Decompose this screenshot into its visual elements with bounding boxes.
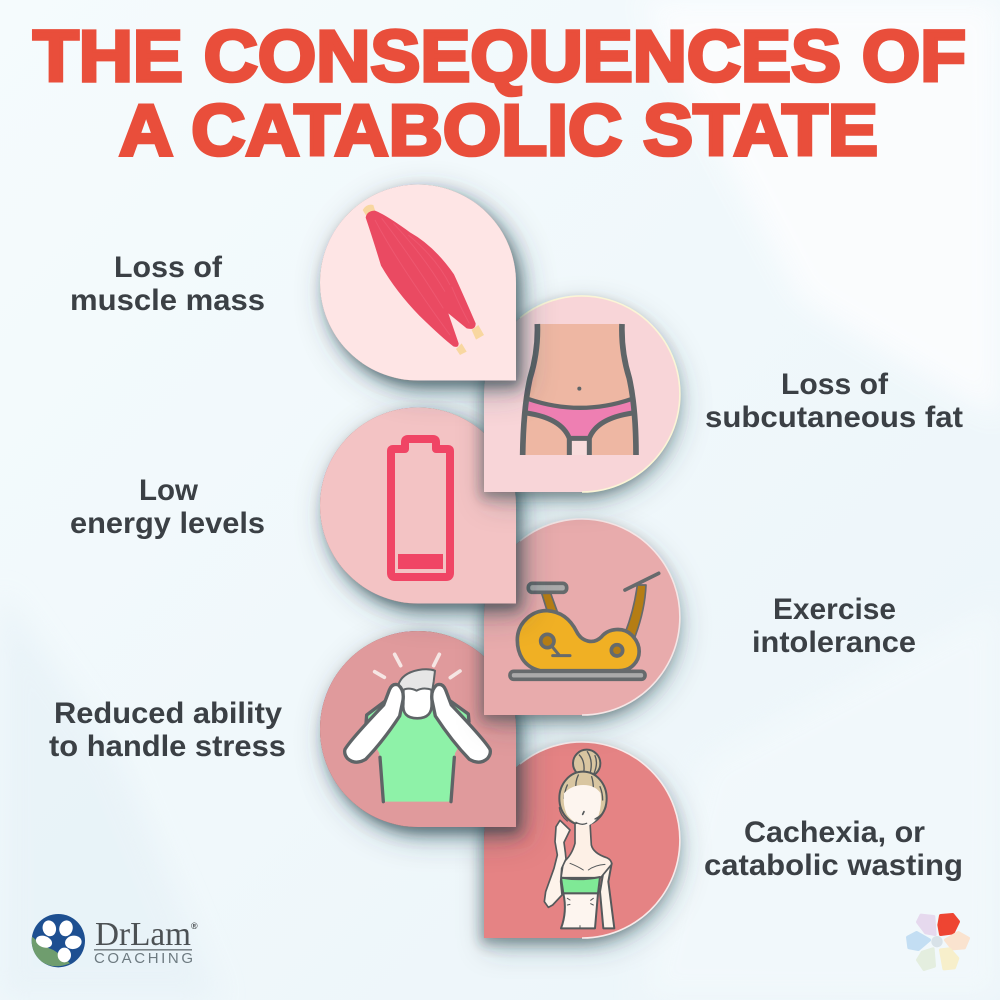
label: loss of muscle mass: muscle mass [70, 284, 265, 317]
label: exercise intolerance: Exercise [773, 593, 896, 626]
label: loss of subcutaneous fat: subcutaneous fat [705, 401, 963, 434]
label: loss of muscle mass [70, 251, 265, 317]
logo: DrLam Coaching: COACHING [94, 950, 193, 967]
panel: cachexia drop [484, 742, 680, 938]
title [33, 17, 966, 171]
panel: exercise drop [484, 519, 680, 715]
label: exercise intolerance [752, 593, 916, 659]
icon: lower abdomen [523, 324, 636, 455]
logo: DrLam Coaching: ® [191, 921, 198, 931]
title: A CATABOLIC STATE [119, 91, 878, 171]
label: reduced ability to handle stress: to handle stress [49, 730, 286, 763]
label: reduced ability to handle stress [49, 697, 286, 763]
logo: DrLam Coaching [32, 914, 198, 967]
logo: DrLam Coaching: DrLam [95, 916, 191, 953]
icon: exercise bike [510, 573, 659, 679]
panel: stress drop [320, 631, 516, 827]
icon: low battery [391, 439, 450, 577]
icon: flower mark [908, 915, 968, 969]
label: low energy levels [70, 474, 265, 540]
label: cachexia or catabolic wasting: catabolic wasting [704, 849, 963, 882]
label: loss of subcutaneous fat [705, 368, 963, 434]
label: low energy levels: Low [139, 474, 199, 507]
label: exercise intolerance: intolerance [752, 626, 916, 659]
label: loss of muscle mass: Loss of [114, 251, 223, 284]
label: cachexia or catabolic wasting: Cachexia, or [744, 816, 925, 849]
icon: thin woman [544, 750, 614, 928]
title: THE CONSEQUENCES OF [33, 17, 966, 97]
icon: muscle [363, 205, 484, 355]
panel: subcutaneous fat drop [484, 296, 680, 492]
label: loss of subcutaneous fat: Loss of [781, 368, 889, 401]
label: low energy levels: energy levels [70, 507, 265, 540]
label: reduced ability to handle stress: Reduced ability [54, 697, 282, 730]
label: cachexia or catabolic wasting [704, 816, 963, 882]
icon: stressed person [345, 654, 490, 802]
panel: low energy drop [320, 407, 516, 604]
icon: logo flower [32, 914, 85, 967]
panel: muscle drop [320, 184, 516, 380]
